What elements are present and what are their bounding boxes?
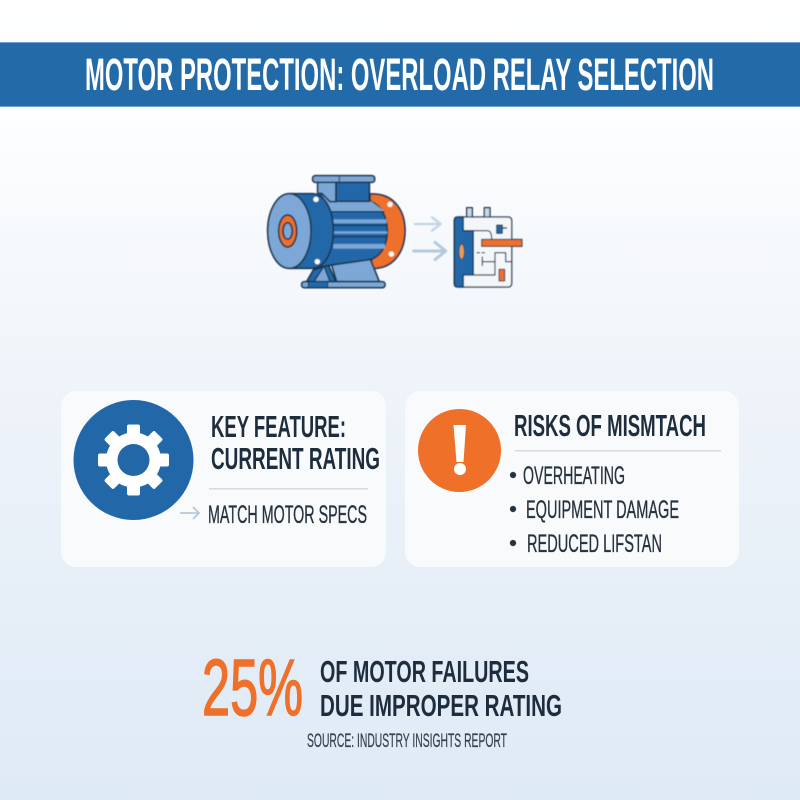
statistic label: OF MOTOR FAILURES [320,654,529,689]
risk list [510,462,679,558]
icon: gear [74,400,194,520]
icon: warning [418,409,501,492]
risk list: EQUIPMENT DAMAGE [526,496,679,524]
text: match motor specs: MATCH MOTOR SPECS [208,501,367,529]
illustration: motor and overload relay [268,176,522,288]
title banner [0,42,800,107]
statistic: 25 percent: 25% [202,643,303,732]
motor body [313,193,387,268]
arrow: match specs [180,507,199,519]
risk list: REDUCED LIFSTAN [527,530,662,558]
panel: risks of mismatch [405,391,739,567]
icon: overload relay [454,208,522,287]
icon: electric motor [268,176,405,288]
motor legs [307,265,336,282]
statistic label [320,654,562,723]
heading: key feature: KEY FEATURE: [211,409,346,444]
motor neck [318,182,336,202]
statistic label: DUE IMPROPER RATING [320,688,562,723]
panel: key feature [61,391,386,567]
motor front band [289,194,333,268]
motor rear cover [370,194,405,268]
heading: current rating: CURRENT RATING [211,441,380,476]
risk list: OVERHEATING [523,462,625,490]
arrow: upper [415,217,441,231]
source: SOURCE: INDUSTRY INSIGHTS REPORT [307,731,507,752]
arrow: lower [414,242,446,260]
